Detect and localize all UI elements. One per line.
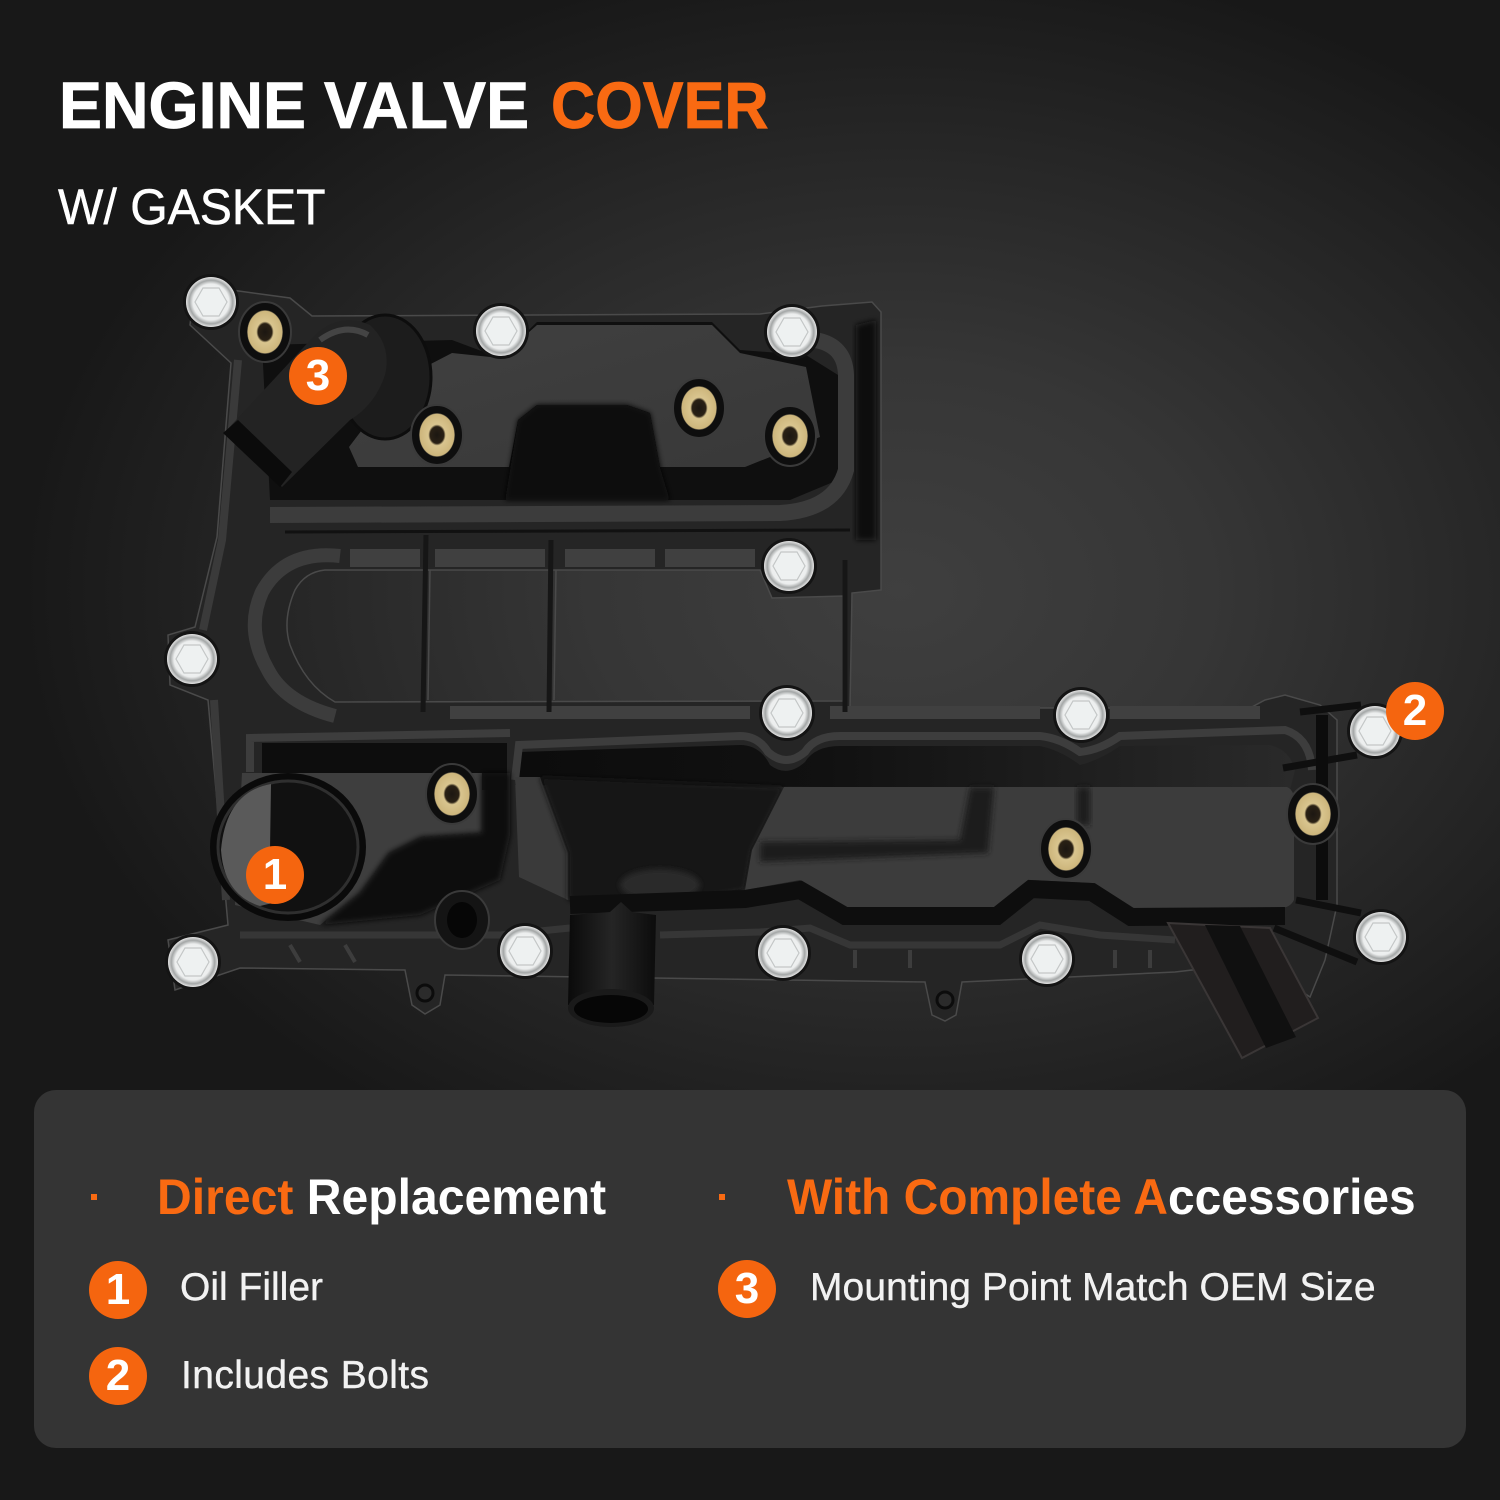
bullet right xyxy=(719,1194,725,1200)
window bars xyxy=(423,535,845,712)
legend 3 xyxy=(718,1260,776,1318)
title xyxy=(59,68,769,142)
label: oil filler: Oil Filler xyxy=(180,1266,323,1309)
legend 1: 1 xyxy=(106,1265,130,1314)
right port xyxy=(1168,923,1318,1058)
subtitle: W/ GASKET xyxy=(58,179,326,235)
marker 1 xyxy=(246,846,304,904)
legend 1 xyxy=(89,1261,147,1319)
rubber plug xyxy=(435,891,489,949)
label: mounting point: Mounting Point Match OEM Size xyxy=(810,1266,1376,1309)
bullet left xyxy=(91,1194,97,1200)
bolts xyxy=(164,274,1409,990)
funnel xyxy=(515,777,568,900)
marker 1: 1 xyxy=(263,850,287,899)
bottom port xyxy=(568,902,656,1027)
right plate xyxy=(745,787,1294,908)
top chamber plateau xyxy=(349,325,820,467)
panel: features xyxy=(34,1090,1466,1448)
lower chamber recess xyxy=(515,745,1295,790)
title: COVER xyxy=(551,68,769,142)
heading: direct replacement: Direct Replacement xyxy=(157,1169,606,1225)
marker 3 xyxy=(289,347,347,405)
label: includes bolts: Includes Bolts xyxy=(181,1354,429,1397)
marker 2 xyxy=(1386,682,1444,740)
hose port top: elbow xyxy=(223,315,431,487)
threaded inserts xyxy=(239,302,1339,879)
title: ENGINE VALVE xyxy=(59,68,529,142)
marker 2: 2 xyxy=(1403,686,1427,735)
marker 3: 3 xyxy=(306,351,330,400)
right wall of top chamber xyxy=(856,320,876,540)
cover body xyxy=(168,285,1337,1021)
rib strip xyxy=(350,549,1260,719)
legend 2: 2 xyxy=(106,1351,130,1400)
lower chamber band lines xyxy=(250,733,510,772)
heading: complete accessories: With Complete Accessories xyxy=(787,1169,1416,1225)
legend 3: 3 xyxy=(735,1264,759,1313)
product image: engine valve cover xyxy=(164,274,1409,1060)
bracket struts right xyxy=(1274,705,1361,962)
bottom ribs xyxy=(290,945,1150,968)
oil filler opening xyxy=(210,773,366,921)
lower wall xyxy=(570,889,1285,917)
tab holes xyxy=(417,985,953,1008)
left plate around filler xyxy=(235,773,482,925)
top chamber wall xyxy=(262,322,838,500)
window frame ribs xyxy=(255,555,340,716)
legend 2 xyxy=(89,1347,147,1405)
